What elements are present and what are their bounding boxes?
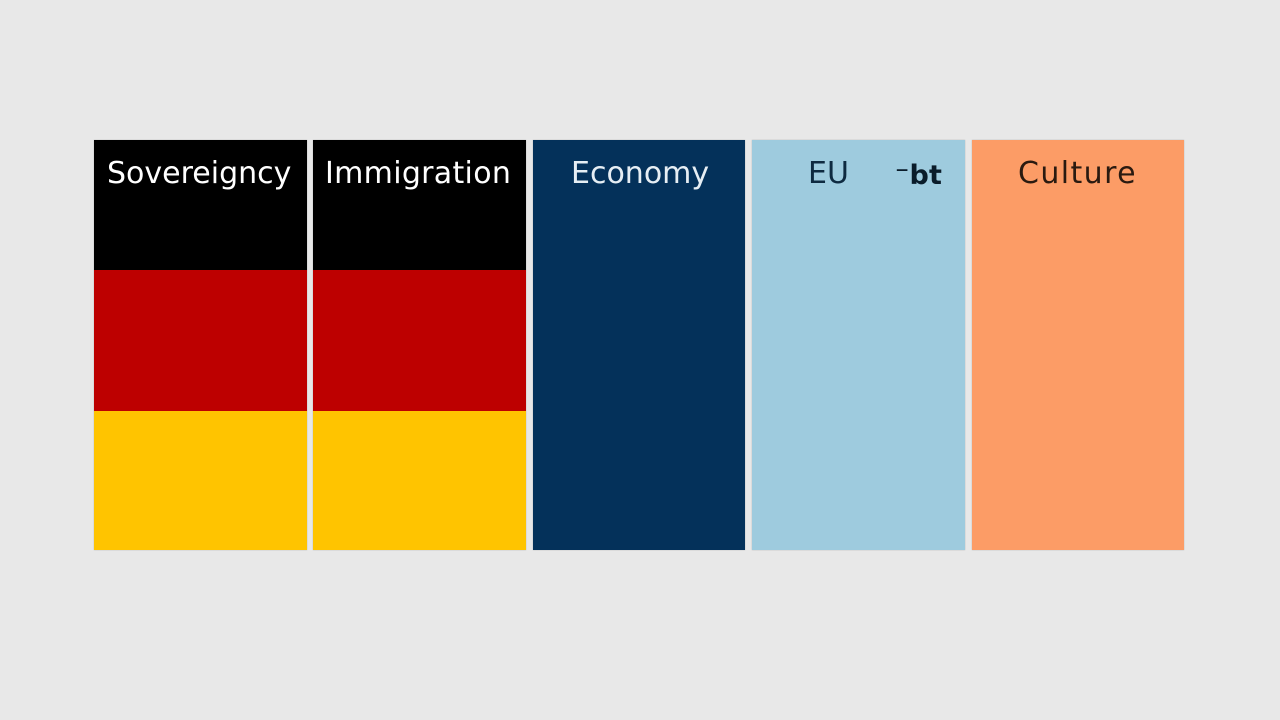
heading: EU: EU — [808, 156, 849, 191]
black band — [313, 140, 526, 270]
panel: Economy column — [533, 140, 745, 550]
panel: EU column — [752, 140, 965, 550]
gold band — [313, 411, 526, 550]
heading: Sovereignty: Sovereigncy — [107, 156, 291, 191]
red band — [313, 270, 526, 411]
red band — [94, 270, 307, 411]
black band — [94, 140, 307, 270]
heading: Economy: Economy — [571, 156, 709, 191]
panel: Culture column — [972, 140, 1184, 550]
heading: Immigration: Immigration — [325, 156, 511, 191]
panel: Immigration column — [313, 140, 526, 550]
gold band — [94, 411, 307, 550]
panel: Sovereignty column — [94, 140, 307, 550]
heading: Culture: Culture — [1018, 156, 1137, 191]
garbled glyphs in EU heading: ⁻bt — [895, 160, 942, 191]
